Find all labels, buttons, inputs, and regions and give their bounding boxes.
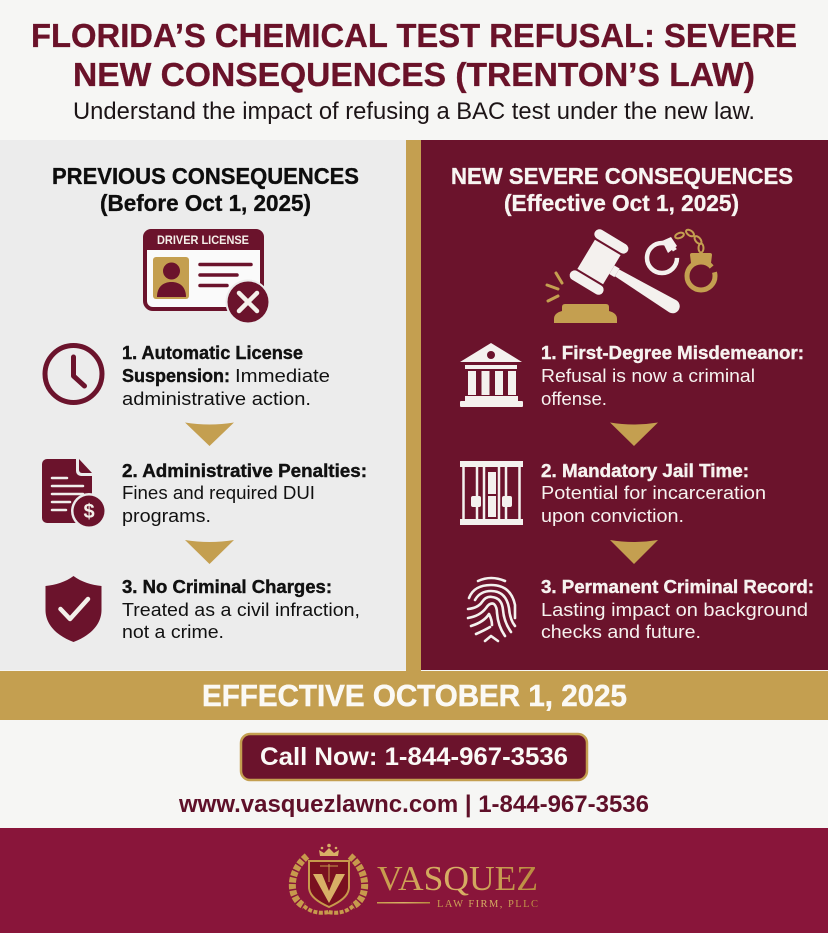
banner: effective date: EFFECTIVE OCTOBER 1, 2025 (202, 678, 627, 713)
title: FLORIDA’S CHEMICAL TEST REFUSAL: SEVERE (31, 17, 797, 54)
icon: jail bars (460, 461, 523, 525)
call button: Call Now: 1-844-967-3536 (260, 743, 568, 771)
text: item 1: administrative action. (122, 389, 311, 409)
icon: courthouse (460, 343, 523, 407)
call button (241, 734, 587, 780)
icon: gavel and handcuffs (547, 227, 715, 335)
divider: gold column with side arrows (406, 140, 443, 671)
logo wordmark: VASQUEZ (377, 859, 538, 898)
text: item 2 (122, 461, 367, 526)
subtitle: Understand the impact of refusing a BAC test under the new law. (73, 98, 755, 125)
item 2: mandatory jail time (460, 461, 766, 526)
text: item 1 (541, 343, 804, 409)
logo wordmark: LAW FIRM, PLLC (437, 899, 538, 910)
logo emblem (292, 844, 365, 913)
icon: shield with check (46, 576, 102, 642)
item 2: administrative penalties (42, 459, 367, 529)
heading: new severe consequences: NEW SEVERE CONSEQUENCES (451, 163, 793, 189)
text: item 2: upon conviction. (541, 506, 684, 526)
heading: previous consequences: PREVIOUS CONSEQUENCES (52, 163, 359, 189)
text: item 3 (541, 577, 814, 642)
text: item 1: Immediate (235, 366, 330, 386)
text: item 2: 2. Administrative Penalties: (122, 461, 367, 481)
panel: new severe consequences (421, 140, 828, 670)
text: item 1: Suspension: (122, 366, 230, 386)
item 1: automatic license suspension (45, 343, 330, 409)
title: NEW CONSEQUENCES (TRENTON’S LAW) (73, 56, 755, 93)
arrow: down 1 (610, 422, 658, 446)
title (31, 17, 797, 93)
contact line: www.vasquezlawnc.com | 1-844-967-3536 (178, 791, 649, 818)
icon: fingerprint (468, 578, 515, 641)
item 3: permanent criminal record (468, 577, 814, 642)
text: item 2: programs. (122, 506, 211, 526)
heading: previous consequences: (Before Oct 1, 2025) (100, 190, 311, 216)
text: item 2: Potential for incarceration (541, 483, 766, 503)
text: item 3: Lasting impact on background (541, 600, 808, 620)
text: item 2: 2. Mandatory Jail Time: (541, 461, 749, 481)
arrow: down 1 (185, 422, 234, 446)
icon: document with dollar (42, 459, 107, 529)
arrow: down 2 (185, 540, 234, 564)
heading: new severe consequences: (Effective Oct 1, 2025) (504, 190, 739, 216)
text: item 3: 3. Permanent Criminal Record: (541, 577, 814, 597)
text: item 1: Refusal is now a criminal (541, 366, 755, 386)
panel: previous consequences (0, 140, 406, 670)
text: item 3: 3. No Criminal Charges: (122, 577, 332, 597)
item 1: first-degree misdemeanor (460, 343, 804, 409)
banner: effective date (0, 671, 828, 720)
footer (0, 828, 828, 933)
text: item 3: checks and future. (541, 622, 701, 642)
logo: Vasquez Law Firm (292, 844, 538, 913)
text: item 2: Fines and required DUI (122, 483, 315, 503)
icon: driver license with X: DRIVER LICENSE (157, 233, 249, 247)
text: item 2 (541, 461, 766, 526)
icon: clock (45, 346, 102, 402)
header (31, 17, 797, 125)
item 3: no criminal charges (46, 576, 360, 642)
text: item 3 (122, 577, 360, 642)
text: item 3: Treated as a civil infraction, (122, 600, 360, 620)
text: item 1: 1. Automatic License (122, 343, 303, 363)
icon: document with dollar: $ (83, 501, 95, 523)
text: item 1: 1. First-Degree Misdemeanor: (541, 343, 804, 363)
text: item 1: offense. (541, 389, 607, 409)
heading: new severe consequences (451, 163, 793, 216)
text: item 1 (122, 343, 330, 409)
arrow: down 2 (610, 540, 658, 564)
icon: driver license with X (143, 229, 270, 324)
text: item 3: not a crime. (122, 622, 224, 642)
heading: previous consequences (52, 163, 359, 216)
